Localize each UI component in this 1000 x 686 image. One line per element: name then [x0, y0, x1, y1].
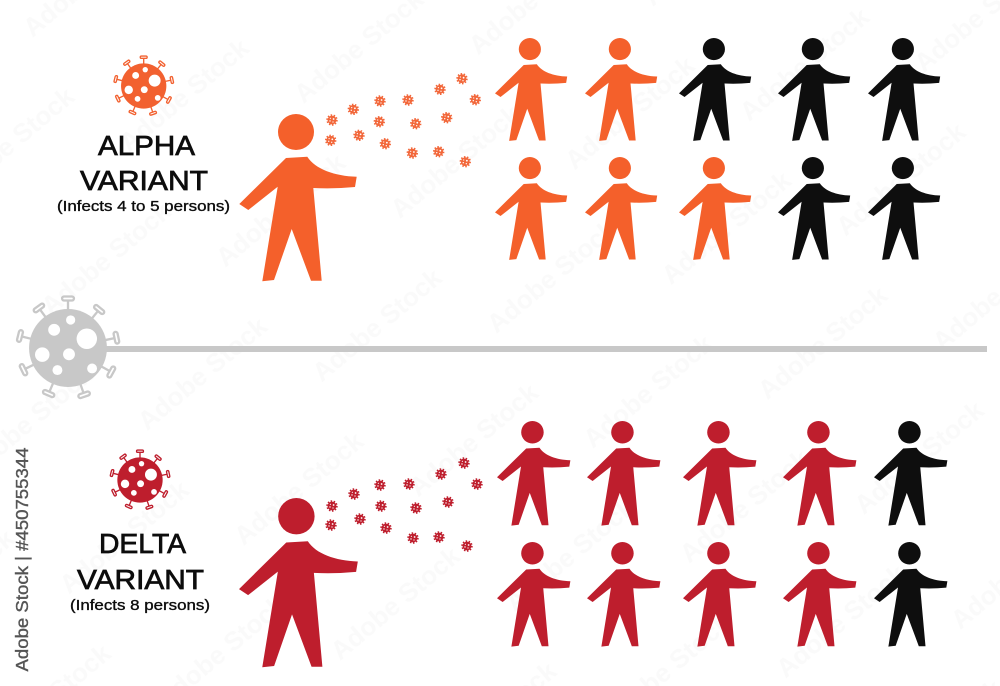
heading: alpha variant [80, 130, 208, 196]
people row: alpha bottom [495, 157, 940, 260]
heading: delta variant [77, 528, 204, 595]
icon: delta virus [110, 450, 170, 509]
text: delta infection count: (Infects 8 persons) [70, 598, 210, 614]
text: stock image id: Adobe Stock | #450755344 [12, 447, 32, 672]
heading: alpha variant: VARIANT [80, 165, 208, 196]
people row: delta top [497, 421, 947, 526]
panel: delta variant [70, 421, 947, 667]
heading: alpha variant: ALPHA [98, 130, 195, 161]
panel: alpha variant [57, 38, 940, 281]
figure: delta spreader [239, 498, 358, 667]
heading: delta variant: DELTA [99, 528, 186, 559]
figure: alpha spreader [239, 114, 357, 281]
people row: alpha top [495, 38, 940, 141]
text: alpha infection range: (Infects 4 to 5 persons) [57, 199, 230, 215]
virus particle cloud: alpha [326, 74, 480, 167]
heading: delta variant: VARIANT [77, 564, 204, 595]
divider with grey virus [17, 297, 987, 399]
icon: alpha virus [114, 56, 174, 115]
virus particle cloud: delta [326, 458, 482, 551]
people row: delta bottom [497, 542, 947, 647]
